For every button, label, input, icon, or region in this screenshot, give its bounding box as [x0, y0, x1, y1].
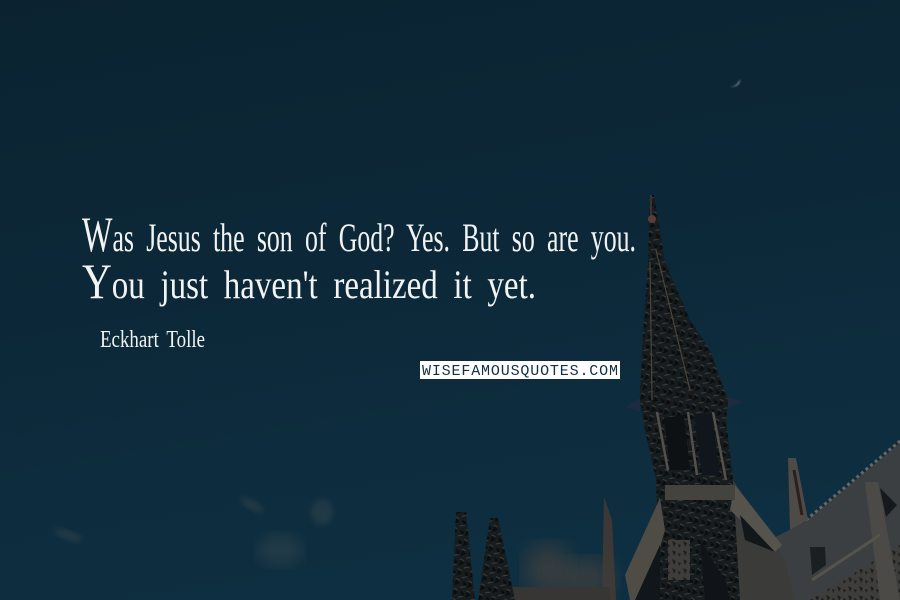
building silhouette: right wing: [760, 441, 900, 600]
left twin pinnacles: [452, 512, 615, 600]
quote line 1: Was Jesus the son of God? Yes. But so are you.: [82, 206, 636, 262]
spire side crockets: [626, 397, 743, 412]
clouds: [52, 494, 333, 566]
roof behind pinnacles: [524, 544, 572, 596]
quote text: [82, 206, 636, 309]
crenellated roof line: [806, 441, 900, 520]
spire tip: [650, 195, 652, 217]
spire lower roof: [630, 480, 795, 600]
small pinnacle: [788, 458, 808, 530]
right wing wall: [760, 443, 900, 600]
belfry windows: [664, 415, 690, 470]
quote line 2: You just haven't realized it yet.: [82, 253, 536, 309]
right wing gables: [810, 545, 900, 600]
main spire: [602, 195, 795, 600]
watermark logo: WISEFAMOUSQUOTES.COM: [422, 363, 618, 380]
spire tan ribs: [650, 250, 690, 400]
crescent moon: [730, 79, 740, 87]
author: Eckhart Tolle: [100, 327, 205, 353]
buttress: [730, 485, 782, 552]
pinnacle 1: [452, 512, 475, 600]
spire body: [640, 195, 740, 600]
pinnacle 2: [478, 518, 515, 600]
